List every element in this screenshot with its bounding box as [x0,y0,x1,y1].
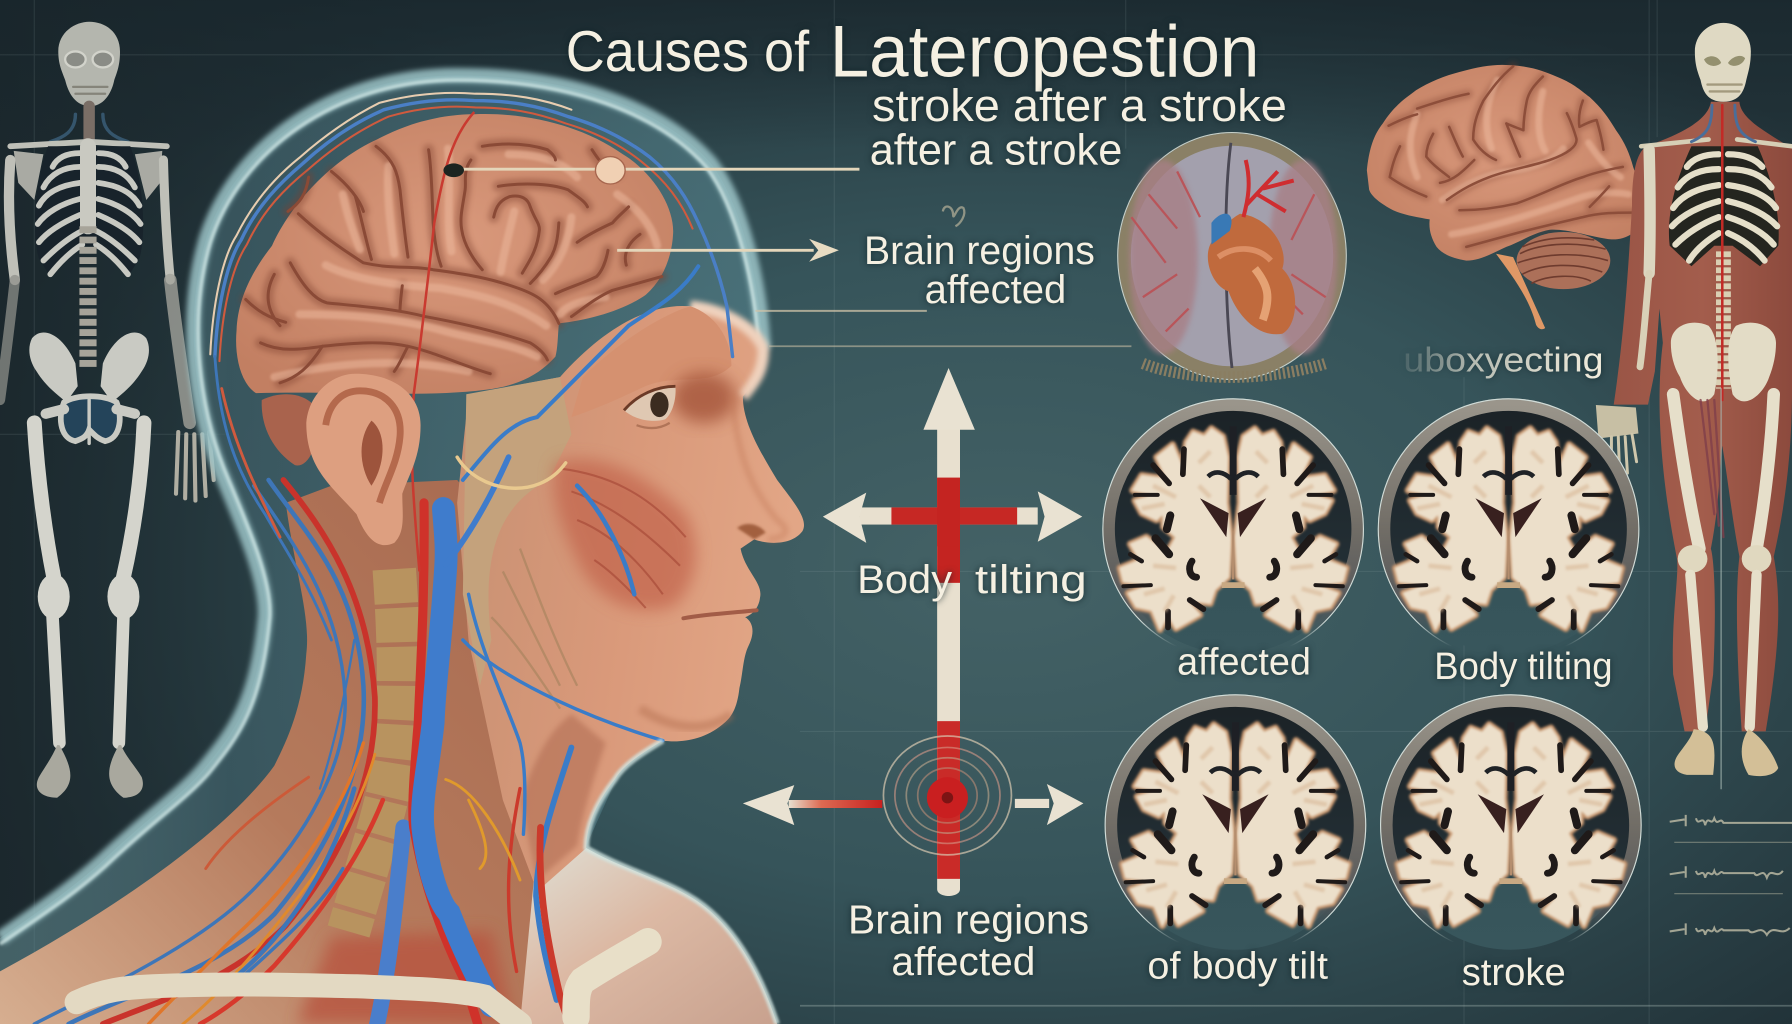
label: body tilting centre: Body [857,558,952,602]
label: brain regions affected upper [864,229,1095,312]
label: body tilting right: Body tilting [1434,645,1613,687]
label: uboxyecting: uboxyecting [1403,341,1603,379]
pelvis [29,332,149,443]
face and shoulder skin [457,306,804,1024]
arms [0,160,214,501]
legs [34,423,144,798]
upper right brain [1367,65,1640,329]
ribcage [35,146,143,368]
nose shading [731,394,786,539]
cheek muscle [554,459,696,610]
title: Lateropestion [830,12,1259,93]
brain slice: bottom left [1105,695,1366,955]
small squiggle mark [943,207,964,226]
mouth [683,610,757,618]
eye [624,386,676,428]
callout: marker top [443,157,859,184]
title: Causes of [566,20,809,84]
label: brain regions affected upper: affected [925,268,1066,312]
brain slice: top left [1103,399,1363,659]
label: body tilting centre [857,558,1087,602]
arm bones and hand [1598,150,1650,473]
left skeleton figure [0,22,214,798]
body tilt cross arrow [743,368,1083,896]
title [566,12,1259,93]
small legend marks [1670,815,1792,935]
clavicle [77,942,648,1024]
halo glow line [0,75,763,938]
right figure ribcage [1641,139,1792,266]
upper horizontal arrow [823,478,1082,546]
organ [1208,160,1295,334]
shoulder halo edge [586,741,777,1024]
ear [262,374,421,545]
subtitle text: after a stroke [870,127,1122,175]
subtitle text: stroke after a stroke [872,80,1287,131]
lower horizontal arrow [743,784,1083,825]
label: stroke: stroke [1462,951,1566,993]
right figure skull [1695,23,1751,102]
jaw shading [640,709,731,727]
striated forehead muscle [571,306,731,417]
label: brain regions affected lower [848,897,1089,984]
cerebellum [1517,232,1610,289]
brainstem [1496,254,1545,329]
lower neck red tissue [297,931,514,1024]
label: body tilting centre: tilting [975,558,1087,602]
halo bright core [0,80,759,944]
subtitle text [870,80,1287,175]
label: brain regions affected upper: Brain regions [864,229,1095,273]
label: of body tilt: of body tilt [1147,944,1329,986]
tan tissue behind cheek [463,377,571,686]
head halo [0,75,763,1024]
vertical shaft [923,368,975,896]
carotid and jugular [377,827,403,1024]
pale forehead edge [690,306,763,397]
right anatomical figure [1598,23,1792,789]
brain slice: bottom right [1381,695,1641,955]
label: affected: affected [1177,640,1311,682]
circular scan with heart-like organ [1118,133,1346,379]
label: brain regions affected lower: Brain regions [848,897,1089,943]
label: brain regions affected lower: affected [891,940,1035,984]
vessel bundle left [34,480,383,1024]
leg bones [1673,394,1778,776]
shoulders and scapula [10,142,167,200]
neck tissue [0,480,537,1024]
pelvis [1671,323,1776,401]
muscle body silhouette [1614,102,1792,731]
faint callout lines [755,311,1131,346]
thin red artery over brain [412,112,474,571]
spine [349,569,399,931]
cerebral brain [236,114,673,394]
neck vessels and spine [34,93,733,1024]
callout arrow to brain regions [617,239,839,262]
outer cranial vessels [215,100,733,357]
skull [50,22,128,143]
brain slice: top right [1378,399,1639,659]
spine and cord [1691,105,1755,400]
main head profile [0,75,804,1024]
eye socket shading [672,373,736,423]
lower target rings [883,736,1011,855]
callout lines from brain [443,157,1131,346]
